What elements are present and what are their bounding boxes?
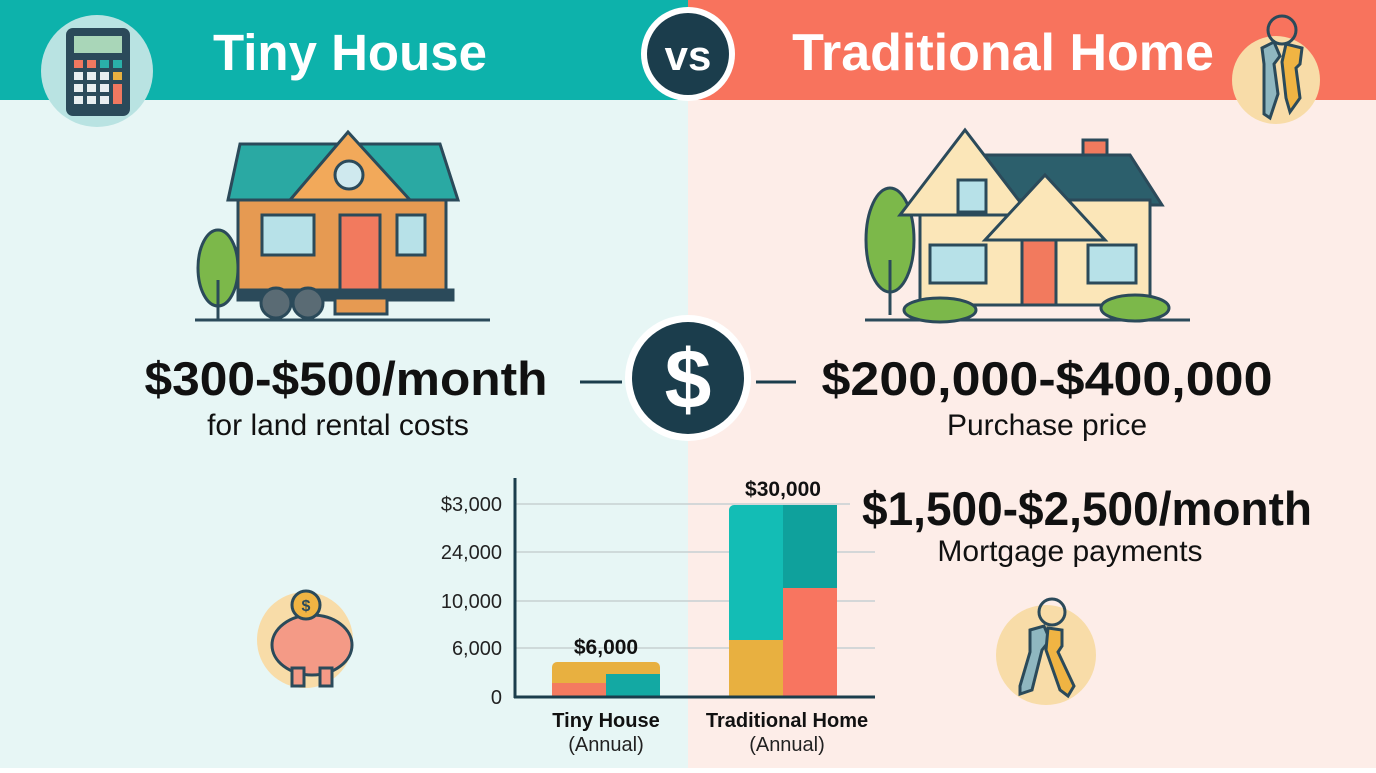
bar: tiny house bbox=[552, 636, 660, 697]
bar chart: annual costs: 24,000 bbox=[441, 542, 502, 564]
icon: piggy bank bbox=[257, 591, 353, 688]
header: traditional home: Traditional Home bbox=[792, 24, 1214, 82]
icon: keys header bbox=[1232, 16, 1320, 124]
bar chart: annual costs: 10,000 bbox=[441, 591, 502, 613]
bar chart: annual costs bbox=[441, 478, 875, 756]
text: tiny house land cost: for land rental costs bbox=[207, 409, 469, 442]
header: tiny house bbox=[0, 0, 688, 100]
text: tiny house land cost bbox=[144, 352, 548, 442]
illustration: traditional home bbox=[865, 130, 1190, 322]
bar: traditional home bbox=[729, 478, 837, 697]
vs badge: vs bbox=[665, 32, 711, 79]
vs badge bbox=[641, 7, 735, 101]
bar chart: annual costs: (Annual) bbox=[568, 734, 644, 756]
icon: keys bbox=[996, 599, 1096, 705]
bar: traditional home: $30,000 bbox=[745, 478, 821, 501]
illustration: tiny house bbox=[195, 132, 490, 320]
icon: calculator bbox=[41, 15, 153, 127]
text: purchase price bbox=[822, 352, 1272, 442]
text: mortgage: $1,500-$2,500/month bbox=[862, 482, 1312, 535]
icon: dollar center: $ bbox=[665, 332, 711, 426]
text: purchase price: $200,000-$400,000 bbox=[822, 352, 1272, 405]
text: mortgage: Mortgage payments bbox=[937, 535, 1203, 568]
text: tiny house land cost: $300-$500/month bbox=[144, 352, 548, 405]
text: purchase price: Purchase price bbox=[947, 409, 1147, 442]
header: traditional home bbox=[688, 0, 1376, 100]
bar chart: annual costs: Traditional Home bbox=[706, 710, 868, 732]
bar chart: annual costs: 0 bbox=[491, 687, 502, 709]
icon: dollar center bbox=[580, 315, 796, 441]
bar chart: annual costs: 6,000 bbox=[452, 638, 502, 660]
bar chart: annual costs: Tiny House bbox=[552, 710, 660, 732]
header: tiny house: Tiny House bbox=[213, 24, 487, 81]
bar chart: annual costs: (Annual) bbox=[749, 734, 825, 756]
icon: piggy bank: $ bbox=[302, 598, 311, 615]
bar: tiny house: $6,000 bbox=[574, 636, 638, 659]
bar chart: annual costs: $3,000 bbox=[441, 494, 502, 516]
text: mortgage bbox=[862, 482, 1312, 568]
